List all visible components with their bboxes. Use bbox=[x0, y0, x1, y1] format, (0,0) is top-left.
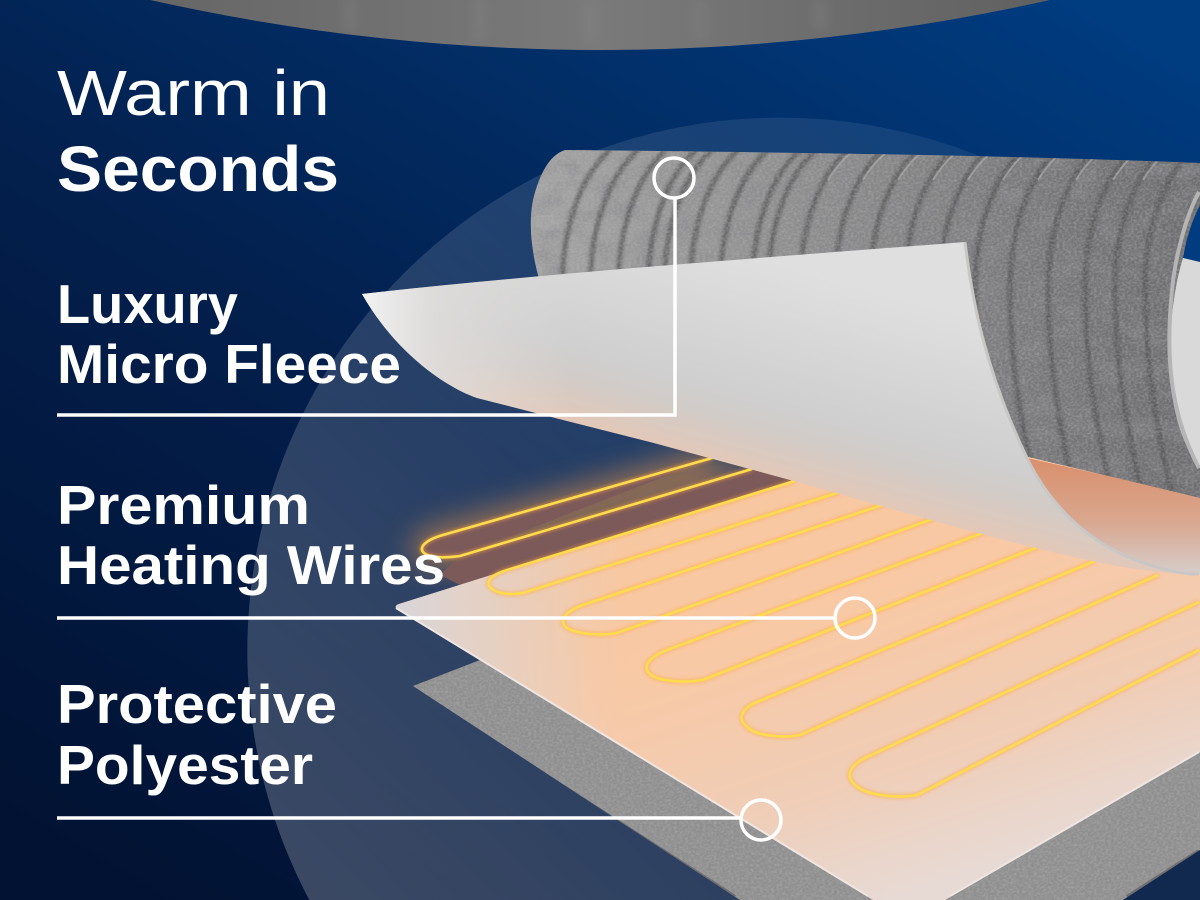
illustration: protective polyester layer bbox=[410, 655, 1200, 900]
label: protective polyester bbox=[57, 673, 337, 796]
illustration: heating pad sheet bbox=[396, 455, 1200, 900]
heating wires bbox=[422, 458, 1199, 796]
label: luxury micro fleece: Luxury bbox=[57, 273, 238, 335]
illustration: grey fleece roll bbox=[520, 140, 1200, 510]
title bbox=[57, 57, 339, 205]
roll opening: navy notch bbox=[1183, 205, 1200, 262]
grey fleece arc at top bbox=[150, 0, 1050, 50]
heat glow behind wires bbox=[422, 458, 793, 590]
label: premium heating wires: Heating Wires bbox=[57, 534, 445, 596]
curled sheet front bbox=[362, 242, 1190, 574]
label: premium heating wires bbox=[57, 474, 445, 596]
illustration: micro fleece curled sheet bbox=[362, 242, 1200, 574]
title: Seconds bbox=[57, 133, 339, 205]
label: luxury micro fleece: Micro Fleece bbox=[57, 333, 401, 395]
curled sheet underside bbox=[1027, 458, 1200, 574]
callout line: protective polyester bbox=[57, 800, 781, 840]
roll opening: white inner layer bbox=[1170, 258, 1200, 468]
callout line: luxury micro fleece bbox=[57, 158, 694, 415]
title: Warm in bbox=[57, 57, 330, 129]
sheet tip highlight bbox=[362, 274, 570, 422]
label: protective polyester: Polyester bbox=[57, 734, 313, 796]
label: luxury micro fleece bbox=[57, 273, 401, 395]
navy corner below polyester layer bbox=[1123, 850, 1200, 900]
label: protective polyester: Protective bbox=[57, 673, 337, 735]
label: premium heating wires: Premium bbox=[57, 474, 310, 536]
translucent background circle bbox=[247, 118, 1200, 900]
callout line: premium heating wires bbox=[57, 598, 875, 638]
brown gap under fleece bbox=[422, 458, 793, 590]
